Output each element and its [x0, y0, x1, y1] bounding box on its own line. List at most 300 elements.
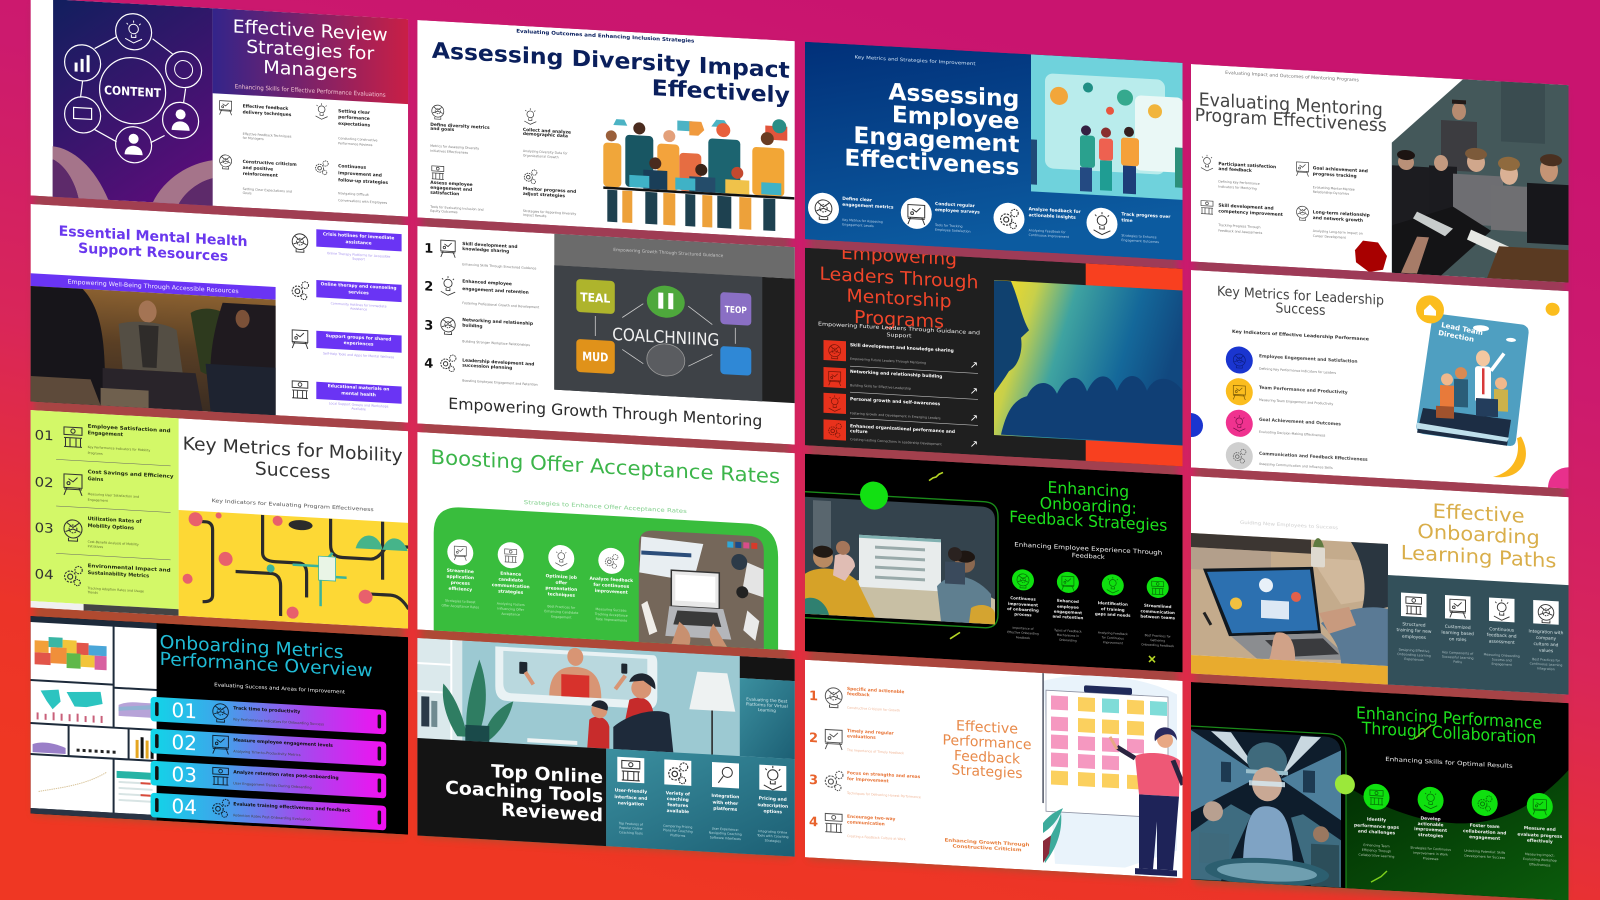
item: educational materials: Available	[351, 407, 366, 411]
item: support groups: Support groups for shared	[326, 333, 391, 343]
item 3: strengths: for improvement	[847, 776, 889, 784]
slide: Effective Performance Feedback Strategies	[805, 659, 1183, 878]
subtitle: Enhancing Growth Through	[944, 838, 1029, 848]
item: online therapy: Community Hotlines for Immediate	[331, 301, 387, 309]
item: goals: Goal achievement and	[1313, 165, 1368, 174]
title: Feedback	[954, 748, 1021, 768]
col: continuous feedback: assessment	[1489, 638, 1515, 646]
item: surveys: Conduct regular	[935, 201, 976, 209]
col: variety: coaching	[667, 796, 689, 803]
item: surveys: Employee Satisfaction	[935, 228, 970, 234]
item: satisfaction: Indicators for Mentoring	[1218, 185, 1257, 191]
col: streamline: application	[447, 574, 474, 581]
dark green wave	[1346, 758, 1568, 900]
col: integration	[709, 762, 742, 841]
col: user-friendly: navigation	[618, 800, 644, 808]
subtitle: Guiding New Employees to Success	[1240, 520, 1339, 531]
decor: green circle	[860, 481, 888, 510]
illustration: video coaching at home	[417, 638, 735, 756]
photo: content cycle diagram with hands: CONTENT	[104, 83, 162, 100]
row: skill development	[824, 340, 978, 373]
subtitle: Evaluating Outcomes and Enhancing Inclusion Strategies	[516, 29, 694, 45]
title	[183, 434, 403, 488]
col: presentation: offer	[555, 580, 568, 586]
col: enhanced engagement: Enhanced	[1057, 598, 1079, 604]
item 3: strengths	[809, 768, 921, 799]
slide: Boosting Offer Acceptance Rates	[417, 432, 795, 651]
col: integration: culture and	[1534, 641, 1559, 648]
item: satisfaction: Defining Key Performance	[1218, 180, 1260, 186]
col: continuous feedback: feedback and	[1487, 632, 1517, 640]
subtitle: Strategies to Enhance Offer Acceptance Rates	[524, 500, 687, 515]
teal panels	[606, 671, 795, 857]
col: user-friendly: Coaching Tools	[619, 830, 643, 836]
col: enhanced engagement	[1052, 571, 1083, 643]
col: pricing: options	[764, 808, 782, 815]
metric: communication	[1226, 441, 1368, 476]
title: Assessing Diversity Impact	[432, 39, 790, 84]
col: enhanced engagement: Mechanisms in	[1057, 633, 1079, 638]
decor: pink corner circle	[1548, 466, 1592, 512]
illustration: team leader card	[1416, 313, 1529, 447]
item: crisis hotlines: Online Therapy Platforms for Accessible	[327, 251, 390, 259]
item 1: specific feedback	[809, 684, 904, 713]
item: support groups: Self-Help Tools and Apps for Mental Wellness	[323, 351, 395, 359]
col: measure: Measure and	[1524, 825, 1556, 833]
col: streamlined communication	[1140, 576, 1176, 648]
subtitle: Enhancing Skills for Optimal Results	[1385, 757, 1513, 770]
col: structured training: employees	[1402, 634, 1427, 641]
subtitle: Support	[886, 332, 912, 340]
item: progress	[1086, 207, 1171, 245]
item 2: engagement	[424, 275, 540, 309]
col: integration: platforms	[713, 806, 738, 813]
decor: gold crescent	[1493, 435, 1526, 479]
item 2: timely evaluations: Timely and regular	[847, 728, 895, 737]
col: variety: Platforms	[670, 833, 686, 838]
subtitle: Key Indicators of Effective Leadership Performance	[1232, 329, 1369, 342]
col: structured training: training for new	[1397, 627, 1432, 635]
item: monitor: Monitor progress and	[523, 186, 576, 195]
col: structured training: Designing Effective	[1399, 648, 1429, 653]
col: user-friendly: Popular Online	[619, 826, 643, 831]
metric 01: 01	[35, 428, 54, 444]
col: presentation: presentation	[545, 585, 577, 593]
subtitle: Evaluating Impact and Outcomes of Mentoring Programs	[1225, 70, 1360, 83]
bar 03	[151, 761, 386, 798]
item: criticism	[220, 155, 297, 198]
col: variety: Plans for Coaching	[663, 828, 693, 834]
title: Strategies	[952, 762, 1022, 782]
subtitle: Constructive Criticism	[952, 843, 1022, 853]
item: satisfaction: and feedback	[1218, 166, 1252, 174]
metric 02: Measuring User Satisfaction and	[88, 492, 139, 499]
title	[1009, 476, 1167, 535]
col: streamlined communication: between teams	[1140, 613, 1176, 620]
col: variety: Comparing Pricing	[663, 824, 692, 829]
col: variety: available	[667, 808, 689, 815]
item: diversity metrics: and goals	[430, 126, 455, 133]
item: satisfaction: Participant satisfaction	[1218, 161, 1276, 170]
item 2: engagement: Fostering Professional Growth and Development	[462, 301, 540, 309]
title: Enhancing	[1047, 478, 1129, 501]
metric 01	[35, 421, 171, 460]
metric: engagement: Employee Engagement and Satisfaction	[1259, 353, 1358, 365]
item: improvement: Continuous	[338, 163, 367, 171]
item: goals: Evaluating Mentor-Mentee	[1313, 185, 1355, 192]
col: feedback	[590, 547, 633, 623]
item 1: specific feedback: 1	[809, 689, 818, 704]
bar 03: 03	[171, 762, 197, 787]
item: feedback techniques: Effective feedback	[243, 103, 288, 112]
header panel: Managers	[263, 57, 357, 83]
slide: Enhancing Performance Through Collaboration	[1189, 682, 1568, 900]
item: feedback techniques: Effective Feedback Techniques	[243, 132, 292, 139]
title: Programs	[854, 307, 944, 333]
header panel	[213, 8, 408, 104]
row: networking	[824, 367, 978, 399]
metric 01: Employee Satisfaction and	[88, 424, 171, 434]
item: relationships	[1296, 206, 1370, 241]
title	[1217, 283, 1384, 322]
item: improvement	[316, 160, 388, 205]
item: engagement	[429, 166, 484, 216]
side subtitle: Platforms for Virtual	[746, 701, 788, 709]
col: variety	[663, 759, 693, 838]
item 3: strengths: 3	[809, 773, 818, 788]
col: streamline: efficiency	[449, 586, 472, 593]
item: demographic data: Analyzing Diversity Data for	[523, 149, 568, 155]
col: identification: Analyzing Feedback	[1098, 631, 1128, 636]
col: integration: Software Interfaces	[710, 835, 741, 841]
item: expectations: performance	[338, 114, 370, 122]
title block: Reviewed	[501, 800, 603, 826]
col: develop: improvement	[1414, 826, 1447, 834]
title	[846, 83, 1019, 175]
col: identification: Identification	[1098, 600, 1128, 607]
item: educational materials	[292, 380, 402, 413]
row: organizational performance: ↗	[970, 439, 978, 450]
bar 03: User Engagement Trends During Onboarding	[233, 781, 312, 790]
slide: Empowering Growth Through Mentoring	[417, 226, 795, 445]
item: progress: Strategies to Enhance	[1121, 233, 1157, 239]
item 1: skills: Enhancing Skills Through Structured Guidance	[462, 262, 536, 270]
item: feedback: actionable insights	[1029, 212, 1076, 221]
gold bar	[1191, 655, 1388, 685]
item 2: timely evaluations: 2	[809, 731, 818, 746]
item: engagement: engagement and	[430, 185, 472, 193]
col: structured training: Experiences	[1404, 657, 1424, 662]
col: continuous improvement: process	[1014, 611, 1032, 617]
item: monitor: adjust strategies	[523, 191, 565, 199]
title: Success	[255, 459, 330, 484]
col: streamlined communication: Gathering	[1150, 638, 1165, 643]
metric 04: Tracking Adoption Rates and Usage	[87, 586, 144, 593]
item: feedback techniques: delivery techniques	[243, 109, 292, 118]
item: feedback techniques: for Managers	[243, 136, 264, 141]
item: relationships: Career Development	[1313, 234, 1347, 240]
metric 04: Sustainability Metrics	[88, 570, 149, 579]
col: streamlined communication: Onboarding Feedback	[1141, 642, 1174, 648]
row: skill development: ↗	[970, 360, 978, 371]
item: engagement metrics: Key Metrics for Assessing	[842, 218, 883, 224]
col: integration: with other	[712, 800, 739, 807]
metric 04: 04	[35, 567, 54, 583]
col: communication: Enhance	[500, 571, 521, 578]
col: pricing: Integrating Online	[758, 829, 787, 835]
slide: Enhancing Onboarding: Feedback Strategies	[803, 454, 1182, 672]
header panel: Effective Review	[233, 16, 388, 46]
col: feedback: Analyze feedback	[590, 576, 633, 584]
green panel	[434, 506, 778, 650]
item: engagement metrics: Engagement Levels	[842, 222, 874, 228]
item: engagement metrics	[808, 192, 894, 229]
col: streamlined communication: Streamlined	[1144, 603, 1172, 609]
slide: Assessing Diversity Impact Effectively	[417, 20, 795, 239]
item 4: leadership: 4	[424, 356, 433, 372]
item 1: specific feedback: Constructive Criticism for Growth	[847, 706, 900, 713]
col: communication: Influencing Offer	[497, 606, 525, 612]
item 3: networking: building	[462, 323, 482, 330]
title block: Coaching Tools	[445, 778, 603, 807]
col: enhanced engagement: employee	[1057, 604, 1079, 610]
title: Performance Overview	[160, 649, 373, 682]
illustration: team leader card: Direction	[1438, 329, 1475, 344]
item: online therapy: Assistance	[350, 306, 367, 311]
item: demographic data: Organizational Growth	[523, 153, 559, 159]
title: Learning Paths	[1401, 541, 1556, 573]
subtitle: Feedback	[1072, 552, 1105, 561]
col: identify: Collaborative Learning	[1359, 853, 1394, 859]
item: educational materials: Local Support Groups and Workshops	[329, 401, 389, 409]
photo: laptop learning	[1191, 531, 1388, 666]
item: engagement: satisfaction	[430, 190, 459, 197]
title block	[417, 738, 606, 847]
photo: content cycle diagram with hands	[53, 0, 213, 206]
item: expectations: Setting clear	[338, 108, 371, 116]
col: enhanced engagement: engagement	[1054, 609, 1082, 615]
col: pricing: Pricing and	[759, 795, 787, 803]
item 3: networking: Building Stronger Workplace Relationships	[462, 339, 530, 347]
title: Empowering	[841, 243, 957, 270]
bar 04: Evaluate training effectiveness and feedback	[233, 801, 351, 814]
col: continuous improvement: Feedback	[1016, 635, 1030, 640]
item 2: engagement: engagement and retention	[462, 286, 529, 296]
item: demographic data: Collect and analyze	[523, 127, 571, 136]
col: streamline: process	[451, 580, 470, 587]
title: Onboarding Metrics	[160, 632, 344, 663]
item 1: skills: Skill development and	[462, 241, 518, 250]
row: organizational performance: Enhanced organizational performance and	[850, 423, 955, 435]
col: continuous improvement: Importance of	[1012, 626, 1034, 631]
col: identification: for Continuous	[1102, 635, 1124, 641]
icon: gold home badge	[1416, 295, 1444, 324]
illustration: diverse team at a table	[603, 109, 794, 232]
col: communication: communication	[492, 582, 530, 590]
title	[1401, 498, 1556, 573]
col: integration: Continuous Learning	[1530, 661, 1562, 667]
illustration: mobility route map	[179, 510, 409, 629]
decor: gold dot	[1546, 302, 1560, 316]
col: presentation: Enhancing Candidate	[544, 609, 578, 615]
purple subtitle band	[31, 273, 276, 300]
item: feedback: Analyze feedback for	[1029, 206, 1082, 215]
col: continuous improvement: Effective Onboarding	[1007, 630, 1039, 636]
col: communication	[492, 541, 530, 617]
metric 01: Key Performance Indicators for Mobility	[88, 445, 150, 453]
metric: engagement: Defining Key Performance Indicators for Leaders	[1259, 367, 1336, 375]
col: integration: Integration	[1537, 666, 1555, 671]
col: customized learning	[1441, 595, 1474, 665]
decor: squiggles	[929, 472, 1155, 662]
item: satisfaction	[1201, 155, 1276, 192]
metric 03: 03	[35, 521, 54, 537]
row: networking: ↗	[970, 386, 978, 397]
col: continuous improvement: of onboarding	[1007, 606, 1039, 613]
col: feedback: for continuous	[593, 582, 630, 590]
item: monitor: Strategies for Reporting Diversity	[523, 209, 576, 216]
illustration: leader profile and silhouettes	[994, 280, 1182, 446]
col: identification: of training	[1101, 606, 1125, 612]
item: competency: Skill development and	[1218, 203, 1274, 212]
col: feedback: improvement	[595, 588, 628, 596]
col: foster: Unlocking Potential: Skills	[1464, 849, 1506, 855]
item: goals: progress tracking	[1313, 171, 1357, 179]
item 3: strengths: Focus on strengths and areas	[847, 770, 921, 780]
item 3: networking: 3	[424, 318, 433, 334]
col: develop: Develop	[1421, 815, 1441, 823]
item: engagement metrics: engagement metrics	[842, 202, 894, 211]
metric 03: Utilization Rates of	[88, 516, 142, 525]
row: organizational performance: culture	[850, 428, 868, 435]
col: identify	[1354, 783, 1399, 859]
item 3: strengths: Techniques for Delivering Honest Performance	[846, 791, 921, 799]
title	[820, 242, 978, 335]
item: engagement: Equity Outcomes	[430, 209, 458, 214]
col: streamline: Offer Acceptance Rates	[442, 603, 479, 609]
item 1: specific feedback: Specific and actionable	[847, 686, 904, 695]
col: continuous improvement: Continuous	[1010, 595, 1036, 602]
col: feedback: Measuring Success:	[596, 607, 627, 613]
metric 03	[35, 513, 142, 551]
col: identification: gaps and needs	[1095, 611, 1131, 618]
metric: goals: Evaluating Decision-Making Effectiveness	[1259, 430, 1326, 438]
col: foster: Foster team	[1470, 823, 1500, 830]
title block: Top Online	[491, 761, 603, 788]
item: expectations: Performance Reviews	[338, 141, 373, 147]
decor: lime circle	[1335, 774, 1355, 795]
col: customized learning: on roles	[1449, 636, 1467, 643]
col: foster	[1463, 789, 1506, 860]
slide: Top Online Coaching Tools Reviewed	[417, 638, 795, 857]
col: customized learning: Customized	[1445, 624, 1471, 631]
subtitle	[1014, 541, 1163, 564]
col: foster: engagement	[1469, 834, 1500, 842]
col: identify: Efficiency Through	[1362, 848, 1391, 854]
col: integration: company	[1536, 636, 1557, 642]
slide: Empowering Leaders Through Mentorship Programs	[805, 241, 1183, 467]
title: Evaluating Mentoring	[1199, 89, 1383, 121]
photo: mentoring meeting	[1392, 75, 1569, 283]
metric 02: 02	[35, 475, 54, 491]
col: continuous feedback	[1484, 597, 1520, 667]
slide: Evaluating Mentoring Program Effectiveness	[1191, 64, 1569, 283]
col: identify: Enhancing Team	[1363, 843, 1390, 848]
col: customized learning: Key Components of	[1442, 650, 1474, 656]
item: engagement: Assess employee	[430, 180, 473, 188]
bar 02	[151, 729, 386, 766]
item: crisis hotlines: Crisis hotlines for immediate	[323, 231, 394, 241]
col: structured training	[1397, 592, 1432, 662]
col: presentation: Best Practices for	[547, 604, 576, 610]
subtitle: Enhancing Employee Experience Through	[1014, 541, 1163, 557]
col: pricing: subscription	[757, 802, 788, 810]
bar 02: Analyzing Time-to-Productivity Metrics	[233, 749, 301, 757]
row: organizational performance: Creating Lasting Connections in Leadership Development	[850, 437, 942, 446]
col: integration: User Experience:	[712, 826, 739, 832]
item 1: skills: 1	[424, 241, 433, 257]
item 4: two-way communication: 4	[809, 815, 818, 830]
col: streamline: Streamline	[447, 568, 474, 575]
item 1: skills: knowledge sharing	[462, 246, 509, 255]
col: integration: Integration with	[1529, 628, 1564, 636]
col: streamline: Strategies to Boost	[445, 599, 476, 604]
row: personal growth	[824, 393, 978, 425]
col: structured training: Onboarding Learning	[1397, 652, 1431, 658]
col: customized learning: Paths	[1453, 660, 1462, 664]
metric 04	[35, 560, 171, 599]
title: Enhancing Performance	[1356, 703, 1542, 733]
col: measure: Measuring Impact:	[1525, 852, 1555, 858]
item: engagement: Tools for Evaluating Inclusion and	[429, 205, 484, 212]
item 4: leadership: Boosting Employee Engagement and Retention	[462, 379, 538, 387]
item 3: networking: Networking and relationship	[462, 317, 533, 327]
item: improvement: Conversations with Employees	[338, 198, 387, 205]
col: customized learning: Successful Learning	[1442, 655, 1474, 660]
grey subtitle band: Empowering Growth Through Structured Guidance	[613, 247, 724, 259]
item: relationships: Long-term relationship	[1313, 209, 1370, 219]
orange corner blocks	[1086, 263, 1183, 467]
item: surveys: employee surveys	[935, 207, 980, 216]
metric 02: Gains	[88, 476, 103, 483]
item 2: timely evaluations: The Importance of Timely Feedback	[846, 748, 904, 755]
item: relationships: and network growth	[1313, 215, 1363, 224]
title	[60, 225, 246, 262]
title: Employee	[892, 102, 1019, 135]
col: communication: candidate	[498, 577, 523, 584]
row: skill development: Empowering Future Leaders Through Mentoring	[850, 357, 926, 365]
item: online therapy: services	[348, 289, 369, 296]
title: Effective	[956, 718, 1018, 738]
item: demographic data: demographic data	[523, 131, 568, 139]
item: surveys	[901, 197, 980, 234]
row: networking: Building Skills for Effective Leadership	[850, 383, 911, 391]
col: identify: and challenges	[1358, 828, 1396, 836]
row: networking: Networking and relationship building	[850, 369, 942, 380]
row: personal growth: Fostering Growth and Development in Emerging Leaders	[850, 411, 941, 420]
col: enhanced engagement: Types of Feedback	[1053, 628, 1082, 634]
col: integration: Integration	[711, 793, 739, 800]
metric: team performance	[1226, 377, 1348, 411]
title: Boosting Offer Acceptance Rates	[431, 445, 780, 488]
item 4: two-way communication: communication	[847, 819, 885, 827]
bar 01: Key Performance Indicators for Onboarding Success	[233, 717, 324, 726]
subtitle: Key Indicators for Evaluating Program Effectiveness	[212, 498, 374, 513]
title: Performance	[942, 732, 1032, 753]
item: feedback techniques	[220, 101, 292, 143]
col: variety: Variety of	[666, 790, 690, 798]
title: Effectively	[652, 76, 790, 109]
